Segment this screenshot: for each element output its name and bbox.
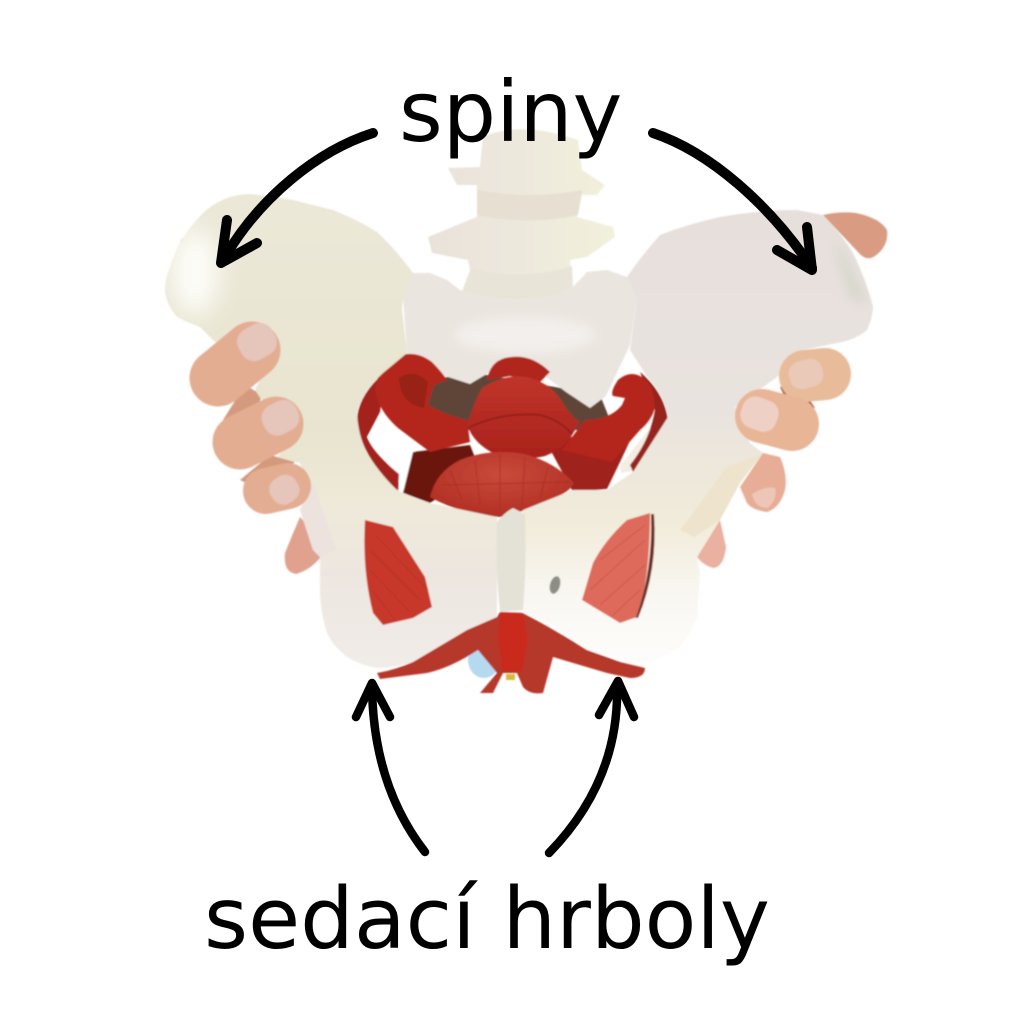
pubic symphysis	[496, 508, 526, 612]
right tube ring	[562, 374, 655, 462]
arrow: spiny to left spine	[221, 133, 373, 263]
central muscle piece	[498, 612, 528, 672]
pelvis model photo held by hands	[165, 129, 887, 693]
finger 1	[218, 318, 282, 378]
right tan bone edge	[680, 453, 763, 537]
finger 3	[265, 470, 304, 509]
title label: spiny: spiny	[399, 63, 622, 161]
perineal muscles	[377, 612, 645, 693]
arrow: left sedací hrbol	[356, 683, 425, 852]
left wing highlight	[171, 228, 219, 316]
arrow: spiny to right spine	[653, 133, 812, 270]
hand parts behind the pelvis	[172, 212, 887, 574]
left tube ring	[375, 354, 470, 452]
left obturator muscle	[364, 520, 432, 625]
right wing edge shading	[835, 240, 868, 305]
right fingers	[737, 356, 826, 512]
finger 2	[240, 395, 304, 442]
right deep organs	[545, 430, 635, 492]
right obturator muscle	[582, 513, 650, 623]
sacrum	[402, 270, 637, 408]
finger A	[737, 393, 792, 436]
yellow detail	[506, 674, 515, 680]
top small ring	[487, 357, 550, 382]
finger C	[740, 453, 786, 512]
spine vertebrae	[428, 129, 615, 301]
arrow: right sedací hrbol	[549, 681, 634, 853]
label: sedací hrboly: sedací hrboly	[204, 869, 770, 968]
white sliver on the right	[620, 424, 655, 473]
deep pelvic organs	[403, 445, 480, 503]
uterus fold line	[468, 415, 572, 434]
finger B	[786, 356, 826, 392]
blue structure	[468, 642, 500, 678]
uterus	[467, 376, 580, 459]
right dark muscle strip	[630, 372, 668, 474]
dark gap beside right muscle	[636, 514, 655, 618]
left fingers	[218, 318, 304, 509]
left hip bone	[165, 194, 497, 668]
left dark muscle strip	[357, 372, 399, 492]
left pink bone edge	[300, 463, 336, 557]
arrows	[221, 133, 812, 853]
right hip bone	[523, 210, 873, 663]
sacrum highlight	[455, 317, 595, 353]
white gap left of the organs	[368, 416, 416, 492]
bolt on the pubic bone	[548, 575, 562, 595]
bladder	[430, 452, 574, 517]
left ring inner shadow	[399, 374, 428, 408]
pelvic cavity background	[425, 372, 610, 430]
